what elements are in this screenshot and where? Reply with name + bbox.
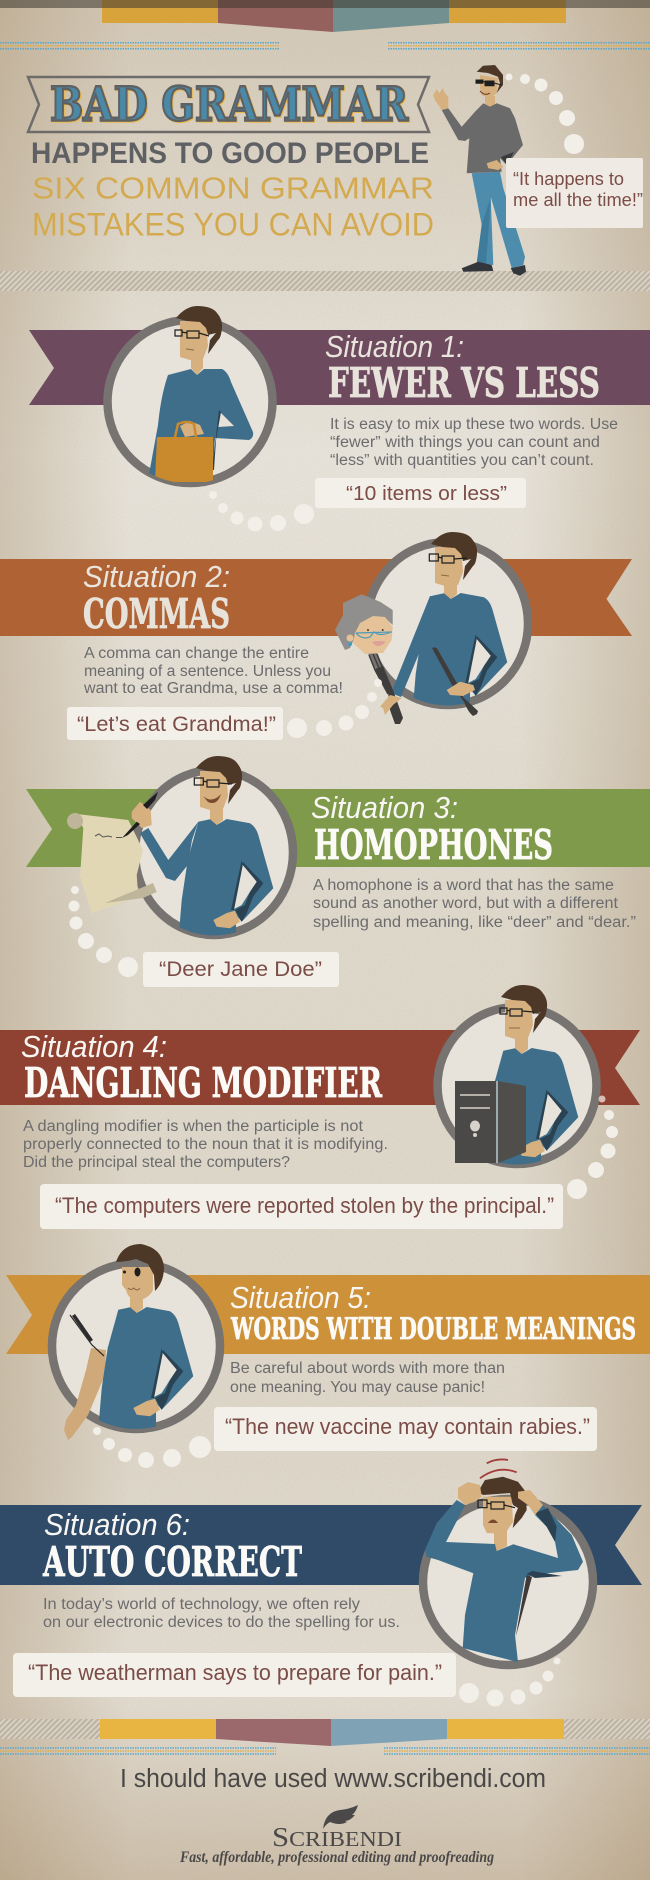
- thought dots: header: [506, 74, 584, 154]
- heading: situation 3: Situation 3:: [311, 790, 458, 825]
- figure with knife and fork: [369, 532, 507, 724]
- body text: [330, 416, 618, 469]
- body text: Did the principal steal the computers?: [23, 1154, 290, 1171]
- thought dots: [459, 1658, 560, 1706]
- callout: “Let’s eat Grandma!”: [77, 713, 276, 736]
- grandma head: [335, 594, 393, 654]
- fork: [369, 654, 403, 724]
- body text: It is easy to mix up these two words. Use: [330, 416, 618, 433]
- body text: Be careful about words with more than: [230, 1360, 505, 1377]
- callout: it happens to me: me all the time!”: [513, 190, 643, 210]
- body text: In today’s world of technology, we often rely: [43, 1596, 360, 1613]
- body text: meaning of a sentence. Unless you: [84, 663, 331, 680]
- callout: [143, 952, 339, 987]
- callout: [214, 1407, 597, 1451]
- thought dots: [93, 1427, 211, 1468]
- banner: [26, 789, 650, 867]
- body text: [23, 1118, 388, 1171]
- callout: [315, 478, 526, 508]
- heading: bad grammar: BAD GRAMMAR: [50, 78, 409, 132]
- body text: [83, 645, 343, 697]
- body text: [313, 877, 636, 931]
- callout: “The new vaccine may contain rabies.”: [225, 1414, 590, 1439]
- callout: [40, 1184, 563, 1229]
- scroll: [67, 813, 157, 913]
- logo: scribendi: [179, 1805, 494, 1866]
- thought dots: [209, 491, 314, 532]
- portrait ring: [52, 1263, 220, 1429]
- portrait ring: [438, 1007, 596, 1164]
- figure with computer tower: [455, 985, 578, 1174]
- heading: six common grammar: SIX COMMON GRAMMAR: [32, 170, 434, 206]
- callout: [67, 707, 283, 740]
- title block: [28, 77, 434, 242]
- figure scratching head: [425, 1459, 583, 1662]
- heading: dangling modifier: DANGLING MODIFIER: [24, 1059, 383, 1107]
- knife: [432, 647, 478, 716]
- body text: properly connected to the noun that it is modifying.: [23, 1136, 388, 1153]
- body text: “fewer” with things you can count and: [330, 434, 600, 451]
- header character: [433, 65, 526, 276]
- wordmark: SCRIBENDI: [272, 1822, 402, 1852]
- icon: feather: [323, 1805, 358, 1829]
- callout: “10 items or less”: [346, 483, 507, 505]
- callout: “The weatherman says to prepare for pain.”: [28, 1660, 442, 1685]
- body text: A dangling modifier is when the participle is not: [23, 1118, 364, 1135]
- banner: [6, 1275, 650, 1354]
- panel: situation 6 auto correct: [0, 1459, 642, 1706]
- callout: it happens to me: “It happens to: [513, 169, 624, 189]
- callout: “The computers were reported stolen by the principal.”: [55, 1193, 554, 1218]
- footer ribbon bar: [0, 1719, 650, 1746]
- panel: situation 2 commas: [0, 532, 632, 740]
- figure writing on scroll: [67, 756, 273, 945]
- body text: [230, 1360, 505, 1396]
- body text: sound as another word, but with a different: [313, 895, 619, 912]
- heading: commas: COMMAS: [83, 590, 230, 638]
- portrait ring: [108, 320, 272, 483]
- callout: [13, 1653, 456, 1697]
- body text: want to eat Grandma, use a comma!: [83, 680, 343, 697]
- body text: [43, 1596, 400, 1631]
- heading: auto correct: AUTO CORRECT: [42, 1538, 302, 1586]
- heading: situation 6: Situation 6:: [44, 1507, 190, 1542]
- computer tower: [455, 1081, 526, 1163]
- portrait ring: [367, 542, 528, 705]
- body text: on our electronic devices to do the spelling for us.: [43, 1614, 400, 1631]
- footer tagline: I should have used www.scribendi.com: [120, 1765, 546, 1793]
- thought dots: [68, 886, 138, 977]
- heading: mistakes you can avoid: MISTAKES YOU CAN AVOID: [32, 206, 434, 242]
- figure with shopping bag: [148, 306, 253, 482]
- top ribbon bar: [0, 0, 650, 32]
- slogan: Fast, affordable, professional editing and proofreading: [179, 1849, 494, 1866]
- heading: situation 5: Situation 5:: [230, 1280, 371, 1315]
- heading: situation 2: Situation 2:: [83, 559, 230, 594]
- panel: situation 3 homophones: [26, 756, 650, 987]
- hatched band: [0, 271, 650, 291]
- portrait ring: [423, 1499, 593, 1665]
- heading: situation 1: Situation 1:: [325, 329, 464, 364]
- banner: [0, 559, 632, 636]
- body text: one meaning. You may cause panic!: [230, 1379, 485, 1396]
- body text: A comma can change the entire: [84, 645, 309, 662]
- callout: “Deer Jane Doe”: [159, 958, 322, 981]
- panel: situation 4 dangling modifier: [0, 985, 640, 1229]
- heading: happens to good people: HAPPENS TO GOOD PEOPLE: [31, 137, 429, 170]
- panel: situation 1 fewer vs less: [29, 306, 650, 532]
- portrait ring: [135, 770, 293, 935]
- heading: situation 4: Situation 4:: [21, 1029, 167, 1064]
- banner: [0, 1505, 642, 1585]
- dotted rules: top: [0, 43, 650, 49]
- body text: spelling and meaning, like “deer” and “dear.”: [313, 914, 636, 931]
- panel: situation 5 words with double meanings: [6, 1244, 650, 1468]
- thought dots: [287, 679, 382, 738]
- title ribbon outline: [28, 77, 429, 132]
- thought dots: [567, 1096, 618, 1199]
- figure with syringe: [64, 1244, 193, 1440]
- banner: [29, 330, 650, 405]
- banner: [0, 1030, 640, 1105]
- dotted rules: bottom: [0, 1748, 650, 1754]
- body text: A homophone is a word that has the same: [313, 877, 614, 894]
- callout: it happens to me: [506, 158, 643, 228]
- body text: “less” with quantities you can’t count.: [330, 452, 594, 469]
